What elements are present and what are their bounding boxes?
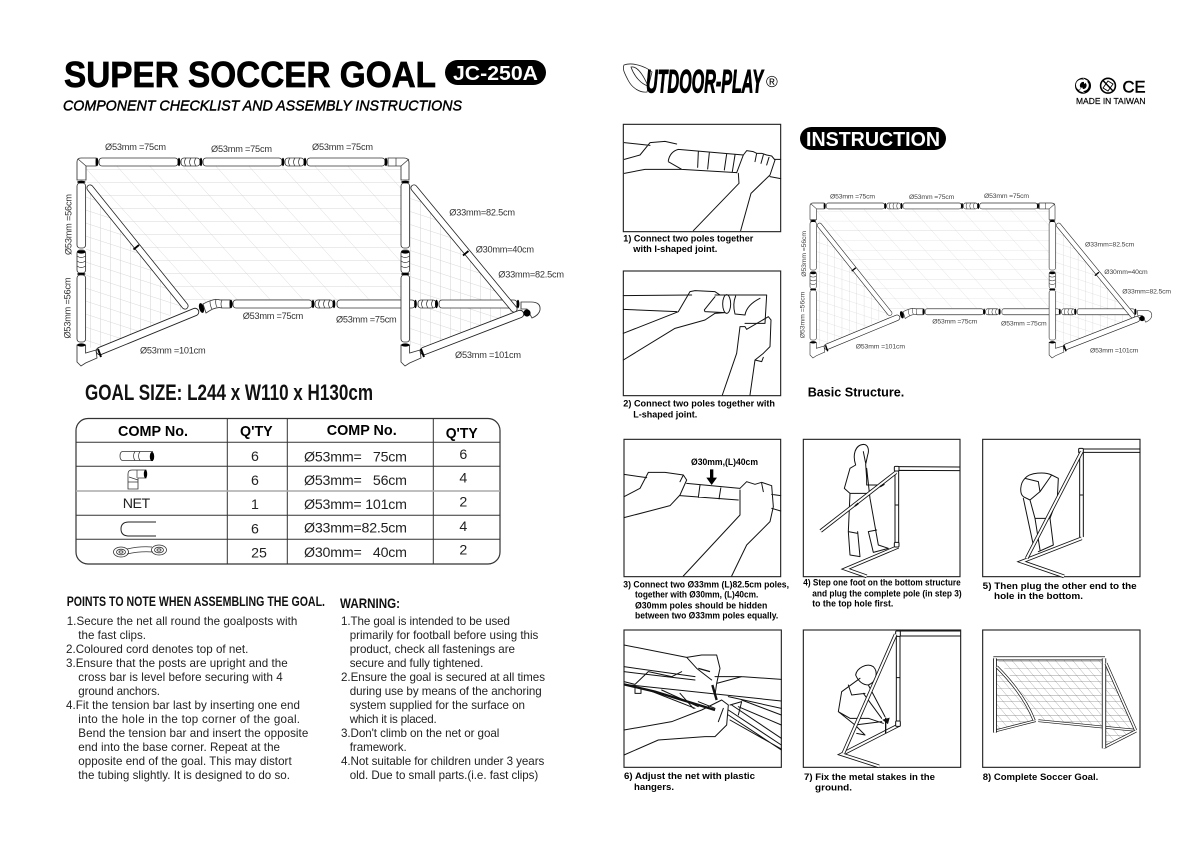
warning — [340, 595, 545, 782]
points to note: 4.Fit the tension bar last by inserting one end — [66, 699, 300, 712]
caption: step 7: ground. — [815, 783, 852, 794]
component table: 25 — [251, 545, 267, 561]
caption: step 3 — [623, 580, 789, 621]
panel: step 1 — [623, 124, 781, 232]
points to note: 3.Ensure that the posts are upright and the — [66, 657, 288, 670]
component table: 6 — [459, 447, 467, 463]
diagram: basic structure: Ø30mm=40cm — [1104, 269, 1148, 276]
warning: during use by means of the anchoring — [350, 685, 542, 698]
diagram: goal components with dimensions: Ø53mm =101cm — [140, 345, 206, 355]
component table: 6 — [251, 449, 259, 465]
caption: step 8: 8) Complete Soccer Goal. — [983, 772, 1098, 783]
caption: step 4 — [803, 578, 962, 610]
caption: step 3: 3) Connect two Ø33mm (L)82.5cm poles, — [623, 580, 789, 591]
caption: step 3: Ø30mm poles should be hidden — [635, 600, 767, 611]
diagram: goal components with dimensions: Ø53mm =56cm — [64, 194, 74, 255]
points to note: end into the base corner. Repeat at the — [78, 741, 280, 754]
component table: 2 — [459, 495, 467, 511]
icon: L-shaped joint — [128, 470, 147, 489]
caption: step 7: 7) Fix the metal stakes in the — [804, 772, 935, 783]
diagram: goal components with dimensions: Ø53mm =75cm — [336, 314, 397, 324]
points to note: POINTS TO NOTE WHEN ASSEMBLING THE GOAL. — [67, 594, 325, 609]
component table: Q'TY — [240, 423, 273, 440]
caption: step 1: 1) Connect two poles together — [623, 234, 754, 245]
diagram: basic structure: Ø53mm =75cm — [830, 193, 875, 200]
diagram: basic structure: Ø53mm =101cm — [856, 343, 905, 350]
certification marks: MADE IN TAIWAN — [1076, 96, 1146, 106]
diagram: basic structure: Ø53mm =101cm — [1090, 347, 1139, 354]
component table: 2 — [459, 543, 467, 559]
diagram: basic structure: Ø53mm =75cm — [932, 318, 978, 325]
warning: old. Due to small parts.(i.e. fast clips) — [350, 769, 538, 782]
warning: which it is placed. — [349, 713, 437, 726]
caption: step 1: with I-shaped joint. — [632, 244, 717, 255]
diagram: goal components with dimensions: Ø53mm =75cm — [105, 142, 166, 152]
diagram: basic structure: Ø53mm =75cm — [909, 194, 955, 201]
logo: Outdoor-Play: ® — [766, 74, 778, 91]
warning: 3.Don't climb on the net or goal — [341, 727, 499, 740]
panel: step 6 — [624, 630, 781, 767]
caption: step 6: 6) Adjust the net with plastic — [624, 771, 756, 782]
caption: step 2 — [623, 399, 775, 420]
callout: 30mm pole: Ø30mm,(L)40cm — [691, 456, 758, 467]
panel: step 5 — [983, 439, 1140, 577]
model badge: JC-250A — [453, 63, 538, 85]
caption: step 5: 5) Then plug the other end to the — [983, 581, 1137, 592]
caption: step 7 — [804, 772, 935, 794]
model badge — [445, 60, 546, 85]
warning: WARNING: — [340, 595, 400, 611]
panel: step 2 — [623, 271, 781, 396]
component table: 1 — [251, 497, 259, 513]
diagram: goal components with dimensions — [63, 142, 564, 366]
subtitle: COMPONENT CHECKLIST AND ASSEMBLY INSTRUCTIONS — [63, 98, 462, 114]
icon: recycle mark — [1075, 78, 1091, 94]
warning: framework. — [350, 741, 407, 754]
icon: tension bar — [121, 522, 156, 536]
points to note: cross bar is level before securing with 4 — [78, 671, 283, 684]
points to note: opposite end of the goal. This may distort — [78, 755, 292, 768]
goal size heading: GOAL SIZE: L244 x W110 x H130cm — [85, 380, 373, 405]
points to note: into the hole in the top corner of the goal. — [78, 713, 300, 726]
panel: step 4 — [803, 439, 960, 577]
caption: step 6 — [624, 771, 756, 793]
logo: Outdoor-Play: UTDOOR-PLAY — [646, 64, 764, 100]
diagram: basic structure: Ø53mm =75cm — [984, 193, 1029, 200]
diagram: basic structure — [799, 193, 1171, 358]
diagram: goal components with dimensions: Ø53mm =75cm — [312, 142, 373, 152]
points to note — [66, 594, 325, 782]
certification marks: CE — [1122, 78, 1146, 96]
points to note: the fast clips. — [78, 629, 146, 642]
logo: Outdoor-Play — [623, 64, 778, 100]
diagram: goal components with dimensions: Ø53mm =75cm — [211, 144, 272, 154]
diagram: basic structure: Ø53mm =75cm — [1001, 321, 1047, 328]
component table: NET — [123, 496, 151, 512]
points to note: 1.Secure the net all round the goalposts with — [67, 615, 297, 628]
component table: Ø30mm= 40cm — [304, 545, 407, 561]
caption: step 5 — [983, 581, 1137, 602]
diagram: basic structure: Ø53mm =56cm — [799, 291, 806, 338]
panel: step 8 — [983, 630, 1140, 767]
warning: system supplied for the surface on — [350, 699, 525, 712]
caption: step 3: together with Ø30mm, (L)40cm. — [635, 589, 758, 600]
caption: step 2: L-shaped joint. — [633, 409, 697, 420]
caption: step 4: to the top hole first. — [812, 599, 893, 610]
component table: Q'TY — [446, 425, 478, 442]
title: SUPER SOCCER GOAL — [64, 54, 436, 95]
diagram: goal components with dimensions: Ø30mm=40cm — [476, 245, 534, 255]
panel: step 3 — [624, 439, 781, 577]
component table — [76, 418, 500, 564]
caption: step 4: 4) Step one foot on the bottom structure — [803, 578, 961, 589]
caption: step 1 — [623, 234, 754, 255]
warning: secure and fully tightened. — [350, 657, 483, 670]
diagram: basic structure: Ø33mm=82.5cm — [1085, 242, 1135, 249]
caption: step 6: hangers. — [634, 782, 674, 793]
diagram: goal components with dimensions: Ø33mm=82.5cm — [498, 270, 564, 280]
component table: 4 — [459, 471, 467, 487]
component table: 4 — [459, 519, 467, 535]
component table: COMP No. — [118, 423, 188, 440]
certification marks — [1075, 78, 1146, 106]
points to note: Bend the tension bar and insert the opposite — [78, 727, 308, 740]
diagram: goal components with dimensions: Ø53mm =75cm — [243, 311, 304, 321]
warning: 4.Not suitable for children under 3 years — [341, 755, 545, 768]
icon: prohibited mark — [1101, 78, 1115, 93]
component table: 6 — [251, 473, 259, 489]
warning: 1.The goal is intended to be used — [341, 615, 510, 628]
instruction badge: INSTRUCTION — [806, 129, 940, 151]
panel: step 7 — [803, 630, 961, 767]
points to note: the tubing slightly. It is designed to do so. — [78, 769, 290, 782]
component table: Ø53mm= 101cm — [304, 497, 407, 513]
component table: Ø33mm=82.5cm — [304, 521, 407, 537]
diagram: goal components with dimensions: Ø53mm =56cm — [63, 277, 73, 338]
caption: step 3: between two Ø33mm poles equally. — [635, 610, 778, 621]
caption: step 5: hole in the bottom. — [994, 591, 1083, 602]
diagram: basic structure: Ø53mm =56cm — [801, 231, 808, 277]
diagram: basic structure: Ø33mm=82.5cm — [1122, 288, 1171, 295]
component table: 6 — [251, 521, 259, 537]
diagram: goal components with dimensions: Ø33mm=82.5cm — [449, 208, 515, 218]
component table: COMP No. — [327, 422, 397, 439]
warning: primarily for football before using this — [350, 629, 539, 642]
icon: fast clip — [114, 545, 166, 557]
points to note: ground anchors. — [78, 685, 160, 698]
warning: 2.Ensure the goal is secured at all times — [341, 671, 545, 684]
component table: Ø53mm= 56cm — [304, 473, 407, 489]
diagram: goal components with dimensions: Ø53mm =101cm — [455, 350, 521, 360]
caption: step 4: and plug the complete pole (in step 3) — [812, 588, 962, 600]
icon: I-shaped joint — [120, 452, 154, 461]
warning: product, check all fastenings are — [350, 643, 515, 656]
basic structure label: Basic Structure. — [808, 385, 904, 400]
component table: Ø53mm= 75cm — [304, 450, 407, 466]
caption: step 2: 2) Connect two poles together with — [623, 399, 775, 410]
points to note: 2.Coloured cord denotes top of net. — [66, 643, 248, 656]
